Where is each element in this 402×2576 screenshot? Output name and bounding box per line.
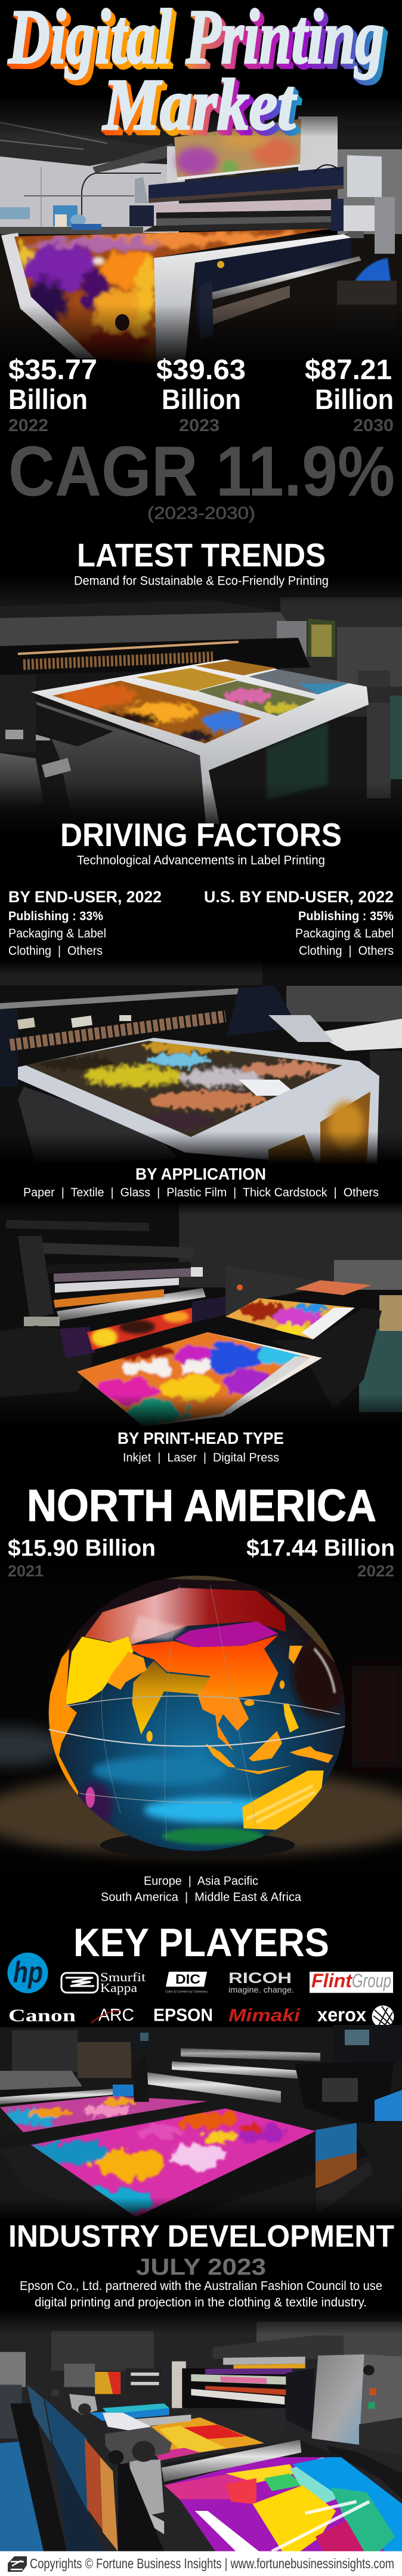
stat right: 2022 bbox=[357, 1562, 394, 1580]
secondary print bbox=[225, 1280, 372, 1339]
colour web bbox=[164, 2455, 402, 2552]
other regions: South America | Middle East & Africa bbox=[101, 1891, 302, 1904]
sheet with prints bbox=[18, 1038, 379, 1164]
stat 2030 bbox=[305, 353, 394, 435]
upper rollers bbox=[182, 2357, 314, 2434]
industry development: digital printing and projection in the clothing & textile industry. bbox=[35, 2295, 367, 2310]
logo: DIC: Color & Comfort by Chemistry bbox=[165, 1990, 208, 1994]
photo: large-format printer with floral print bbox=[0, 96, 402, 376]
globe base bbox=[100, 1831, 295, 1859]
U.S. end-user: Packaging & Label bbox=[295, 927, 394, 940]
stat 2022: 2022 bbox=[8, 416, 48, 435]
logo: DIC: DIC bbox=[175, 1972, 200, 1987]
stat 2023: $39.63 bbox=[156, 353, 246, 385]
market size stats bbox=[8, 353, 394, 435]
north america bbox=[8, 1480, 395, 1580]
background colour unit bbox=[64, 2361, 186, 2408]
machine boxes bbox=[225, 1266, 382, 1409]
global end-user: Packaging & Label bbox=[8, 927, 106, 940]
global end-user bbox=[8, 888, 162, 958]
side panels bbox=[27, 2385, 118, 2552]
stat 2022: Billion bbox=[8, 383, 88, 415]
logo: ricoh: imagine. change. bbox=[228, 1985, 294, 1994]
machine body bbox=[0, 671, 402, 824]
footer logo bbox=[8, 2556, 27, 2572]
title: Market bbox=[103, 66, 298, 146]
industry development: INDUSTRY DEVELOPMENT bbox=[8, 2220, 394, 2254]
stat right: $17.44 Billion bbox=[246, 1536, 395, 1561]
photo fades bbox=[0, 96, 402, 137]
roller housing bbox=[51, 2389, 172, 2552]
title: Market bbox=[104, 67, 299, 147]
by print-head type bbox=[117, 1429, 284, 1464]
U.S. end-user: Clothing | Others bbox=[299, 944, 394, 958]
grey cabinet bbox=[311, 2354, 402, 2499]
logo: flint group: Flint bbox=[311, 1970, 352, 1991]
printer gantry bbox=[129, 155, 395, 254]
printed fabric bbox=[1, 229, 351, 364]
globe ring bbox=[49, 1726, 345, 1746]
globe backdrop glow bbox=[0, 1564, 402, 1875]
logo: hp bbox=[7, 1953, 48, 1993]
driving factors: DRIVING FACTORS bbox=[60, 816, 342, 853]
footer bbox=[0, 2551, 402, 2576]
stat 2030: Billion bbox=[315, 383, 394, 415]
logo: mimaki: Mimaki bbox=[228, 2006, 301, 2025]
print table main bbox=[31, 2108, 316, 2217]
end-user split bbox=[8, 888, 394, 958]
logo: canon: Canon bbox=[8, 2006, 76, 2025]
by application: BY APPLICATION bbox=[135, 1164, 266, 1184]
logo: xerox bbox=[317, 2004, 394, 2028]
photo: printer with sheet of images bbox=[0, 575, 402, 836]
title: Market bbox=[105, 68, 300, 149]
title: Market bbox=[102, 64, 297, 145]
CAGR: (2023-2030) bbox=[147, 504, 255, 523]
stat 2023 bbox=[156, 353, 246, 435]
stat left: 2021 bbox=[8, 1562, 44, 1580]
latest trends: LATEST TRENDS bbox=[77, 536, 326, 573]
logo: hp: hp bbox=[13, 1956, 43, 1989]
stat 2030: 2030 bbox=[353, 416, 394, 435]
printed sheet bbox=[31, 659, 369, 824]
title: Market bbox=[106, 69, 301, 150]
by application bbox=[23, 1164, 379, 1199]
machine bed bbox=[164, 2440, 341, 2485]
main print bbox=[77, 1332, 322, 1427]
printed sheet bbox=[89, 2403, 264, 2462]
logo: flint group bbox=[310, 1970, 393, 1993]
key players heading: KEY PLAYERS bbox=[73, 1920, 329, 1965]
printed roll bbox=[87, 1308, 192, 1350]
logo: DIC bbox=[165, 1972, 208, 1994]
photo: rotary press bbox=[0, 2308, 402, 2552]
globe bbox=[46, 1554, 349, 1859]
by application: Paper | Textile | Glass | Plastic Film | Thick Cardstock | Others bbox=[23, 1186, 379, 1199]
U.S. end-user bbox=[204, 888, 394, 958]
driving factors bbox=[60, 816, 342, 867]
machine rollers bbox=[131, 2025, 402, 2215]
other regions: Europe | Asia Pacific bbox=[144, 1875, 258, 1888]
photo: web press with colourful prints bbox=[0, 1200, 402, 1439]
stat 2022: $35.77 bbox=[8, 353, 97, 385]
industry development: Epson Co., Ltd. partnered with the Australian Fashion Council to use bbox=[20, 2279, 382, 2293]
industry development: JULY 2023 bbox=[136, 2255, 266, 2280]
logo: ricoh bbox=[228, 1970, 294, 1994]
stat 2022 bbox=[8, 353, 97, 435]
latest trends bbox=[74, 536, 329, 588]
by print-head type: Inkjet | Laser | Digital Press bbox=[123, 1451, 279, 1464]
stat left: $15.90 Billion bbox=[8, 1536, 156, 1561]
stat 2030: $87.21 bbox=[305, 353, 392, 385]
U.S. end-user: U.S. BY END-USER, 2022 bbox=[204, 888, 394, 906]
other regions bbox=[101, 1875, 302, 1904]
logo: smurfit kappa: Smurfit bbox=[100, 1970, 146, 1984]
print table left bbox=[0, 2096, 208, 2132]
north america: NORTH AMERICA bbox=[27, 1480, 376, 1530]
print rollers bbox=[10, 1015, 225, 1045]
stat 2023: Billion bbox=[162, 383, 241, 415]
front roller bbox=[162, 2440, 301, 2482]
industry development bbox=[8, 2220, 394, 2310]
logo: epson: EPSON bbox=[153, 2006, 213, 2025]
title bbox=[8, 0, 388, 150]
logo: xerox: xerox bbox=[317, 2004, 366, 2025]
U.S. end-user: Publishing : 35% bbox=[298, 909, 394, 923]
stat left bbox=[8, 1536, 156, 1580]
by print-head type: BY PRINT-HEAD TYPE bbox=[117, 1429, 284, 1447]
latest trends: Demand for Sustainable & Eco-Friendly Printing bbox=[74, 574, 329, 588]
photo: flatbed printers bbox=[0, 2025, 402, 2221]
global end-user: Publishing : 33% bbox=[8, 909, 103, 923]
global end-user: BY END-USER, 2022 bbox=[8, 888, 162, 906]
wall poster bbox=[174, 119, 301, 180]
global end-user: Clothing | Others bbox=[8, 944, 103, 958]
logo: arc: ARC bbox=[98, 2006, 134, 2025]
stat right bbox=[246, 1536, 395, 1580]
logos bbox=[7, 1953, 394, 2028]
driving factors: Technological Advancements in Label Printing bbox=[77, 854, 325, 867]
rollers bbox=[0, 1224, 230, 1397]
stat 2023: 2023 bbox=[179, 416, 219, 435]
photo top fade bbox=[0, 2308, 402, 2334]
logo: ricoh: RICOH bbox=[228, 1970, 292, 1987]
upper printed band bbox=[54, 1289, 164, 1308]
logo: smurfit kappa bbox=[61, 1970, 146, 1995]
logo: smurfit kappa: Kappa bbox=[100, 1981, 138, 1995]
photo: printer with landscape prints bbox=[0, 960, 402, 1164]
